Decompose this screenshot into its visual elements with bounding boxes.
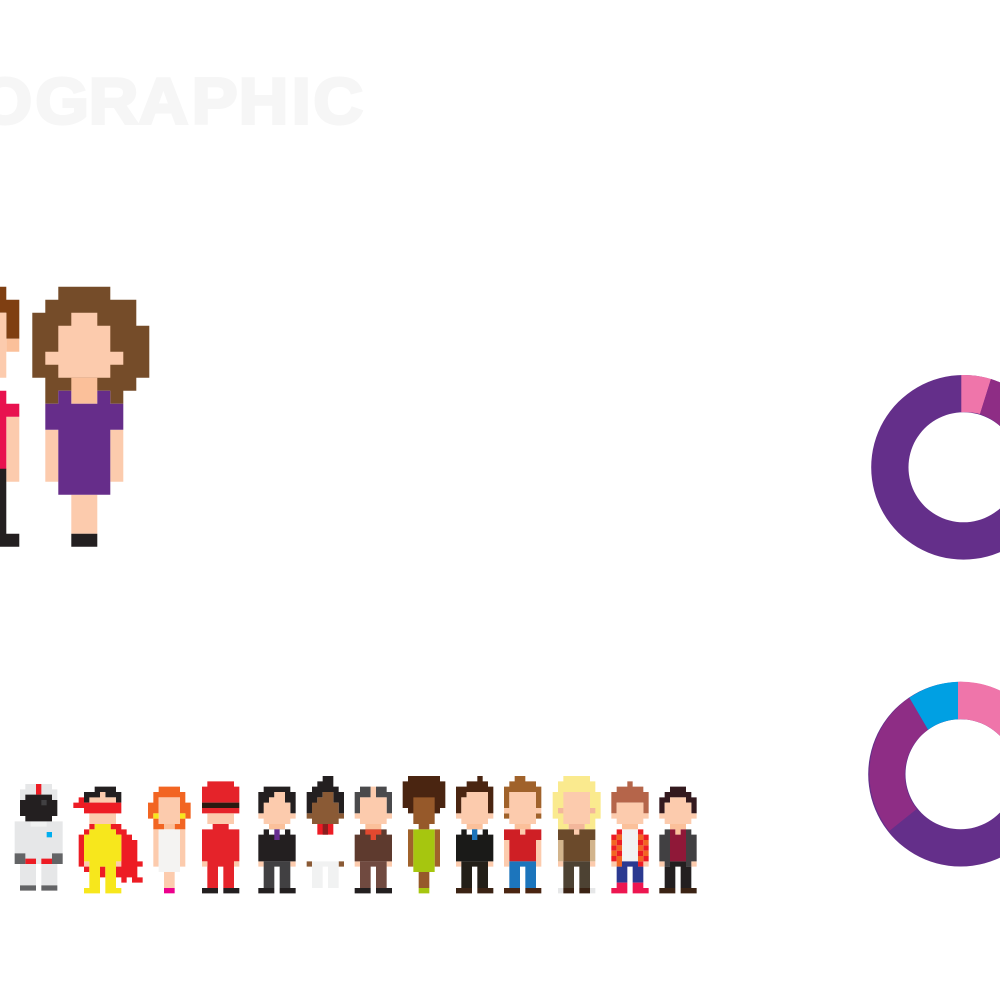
character: man in black suit with blue tie bbox=[456, 776, 493, 893]
character: man in red uniform and hat bbox=[202, 781, 239, 893]
character: astronaut bbox=[15, 784, 63, 891]
row of small pixel characters bbox=[15, 776, 697, 893]
donut chart: lower bbox=[868, 682, 1000, 866]
character: woman with bun and white outfit bbox=[307, 776, 344, 888]
character: redhead in white dress bbox=[148, 787, 191, 893]
large pixel man, cropped at left edge bbox=[0, 287, 19, 547]
character: man in red shirt and blue jeans bbox=[504, 776, 541, 893]
donut chart: upper bbox=[871, 375, 1000, 560]
character: man in black suit with purple tie bbox=[258, 787, 296, 893]
character: man in grey jacket and maroon shirt bbox=[659, 787, 697, 893]
character: balding man in brown suit bbox=[355, 787, 392, 893]
character: superhero with red cape bbox=[73, 787, 143, 893]
character: boy in plaid shirt and red shoes bbox=[611, 781, 649, 893]
character: woman with afro in green dress bbox=[403, 776, 445, 893]
character: blonde person in brown shirt bbox=[553, 776, 601, 893]
large pixel woman in purple dress bbox=[32, 287, 149, 547]
